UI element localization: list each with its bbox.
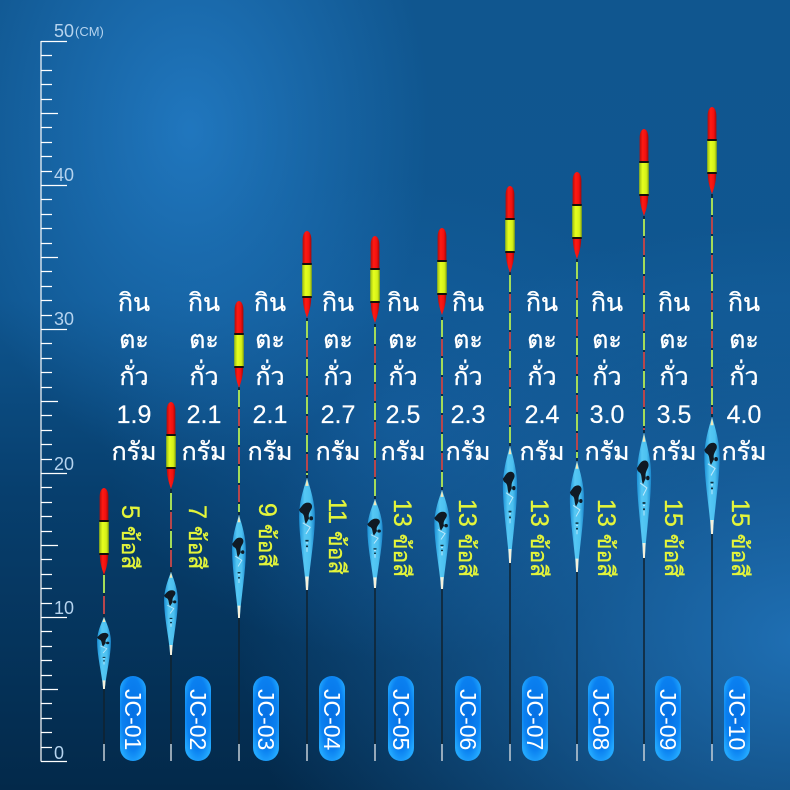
weight label 2.7: กั่ว	[323, 359, 353, 391]
weight label 2.5	[380, 289, 426, 466]
weight label 2.5: กั่ว	[388, 359, 418, 391]
weight label 2.3: ตะ	[453, 326, 483, 354]
badge JC-07: JC-07	[522, 689, 548, 750]
weight label 2.7: ตะ	[323, 326, 353, 354]
weight label 3.0: กั่ว	[592, 359, 622, 391]
weight label 2.1 second	[247, 289, 293, 466]
badge JC-09: JC-09	[655, 689, 681, 750]
segment label 7: 7 ข้อสี	[183, 505, 211, 569]
badge JC-01: JC-01	[120, 689, 146, 750]
weight label 3.5: กั่ว	[659, 359, 689, 391]
weight label 4.0: 4.0	[727, 401, 761, 429]
weight label 1.9	[111, 289, 157, 466]
weight label 2.1 second: กรัม	[247, 438, 293, 466]
weight label 1.9: 1.9	[117, 401, 151, 429]
weight label 2.1: 2.1	[187, 401, 221, 429]
ruler scale: 0	[54, 743, 64, 763]
segment label 13 fourth: 13 ข้อสี	[592, 499, 620, 577]
weight label 2.7: กิน	[322, 289, 354, 317]
segment label 13 second: 13 ข้อสี	[453, 499, 481, 577]
ruler scale: 20	[54, 454, 74, 474]
segment label 15 second: 15 ข้อสี	[726, 499, 754, 577]
badge JC-06: JC-06	[455, 689, 481, 750]
weight label 2.7: 2.7	[321, 401, 355, 429]
float JC-01	[97, 488, 111, 761]
badge JC-03: JC-03	[253, 689, 279, 750]
segment label 5: 5 ข้อสี	[116, 505, 144, 569]
badge JC-08: JC-08	[588, 689, 614, 750]
weight label 4.0: กั่ว	[729, 359, 759, 391]
weight label 2.3: กิน	[452, 289, 484, 317]
float JC-06	[434, 228, 450, 761]
float JC-02	[164, 402, 178, 761]
segment label 13 third: 13 ข้อสี	[525, 499, 553, 577]
weight label 2.1 second: ตะ	[255, 326, 285, 354]
weight label 2.5: กรัม	[380, 438, 426, 466]
weight label 3.0: กรัม	[584, 438, 630, 466]
float JC-04	[299, 231, 315, 761]
float JC-09	[637, 129, 651, 761]
segment label 15: 15 ข้อสี	[659, 499, 687, 577]
weight label 3.5: ตะ	[659, 326, 689, 354]
weight label 2.1 second: กิน	[254, 289, 286, 317]
weight label 1.9: กั่ว	[119, 359, 149, 391]
weight label 2.3: กั่ว	[453, 359, 483, 391]
weight label 2.1: ตะ	[189, 326, 219, 354]
weight label 2.5: กิน	[387, 289, 419, 317]
weight label 2.5: 2.5	[386, 401, 420, 429]
weight label 4.0	[721, 289, 767, 466]
float JC-07	[503, 186, 517, 761]
weight label 3.5: กิน	[658, 289, 690, 317]
ruler scale: 40	[54, 165, 74, 185]
weight label 1.9: กรัม	[111, 438, 157, 466]
weight label 3.5: กรัม	[651, 438, 697, 466]
segment label 9: 9 ข้อสี	[253, 503, 281, 567]
weight label 2.1	[181, 289, 227, 466]
weight label 2.3: กรัม	[445, 438, 491, 466]
segment label 11: 11 ข้อสี	[323, 498, 351, 574]
weight label 2.1 second: กั่ว	[255, 359, 285, 391]
badge JC-05: JC-05	[388, 689, 414, 750]
weight label 2.4	[519, 289, 565, 466]
weight label 3.0: ตะ	[592, 326, 622, 354]
ruler scale: 30	[54, 309, 74, 329]
ruler scale: (CM)	[75, 24, 104, 39]
badge JC-02: JC-02	[185, 689, 211, 750]
weight label 1.9: ตะ	[119, 326, 149, 354]
float JC-05	[367, 236, 383, 761]
weight label 3.0: 3.0	[590, 401, 624, 429]
ruler scale: 10	[54, 598, 74, 618]
weight label 2.1: กรัม	[181, 438, 227, 466]
float JC-08	[570, 172, 584, 761]
weight label 2.1: กิน	[188, 289, 220, 317]
weight label 4.0: กิน	[728, 289, 760, 317]
badge JC-10: JC-10	[724, 689, 750, 750]
weight label 2.4: กิน	[526, 289, 558, 317]
weight label 3.5: 3.5	[657, 401, 691, 429]
ruler scale	[41, 21, 104, 763]
weight label 2.1: กั่ว	[189, 359, 219, 391]
weight label 2.7: กรัม	[315, 438, 361, 466]
weight label 3.0: กิน	[591, 289, 623, 317]
float JC-03	[232, 301, 246, 761]
weight label 1.9: กิน	[118, 289, 150, 317]
ruler scale: 50	[54, 21, 74, 41]
weight label 2.4: กั่ว	[527, 359, 557, 391]
badge JC-04: JC-04	[319, 689, 345, 751]
weight label 4.0: กรัม	[721, 438, 767, 466]
weight label 2.4: 2.4	[525, 401, 559, 429]
segment label 13: 13 ข้อสี	[388, 499, 416, 577]
weight label 2.7	[315, 289, 361, 466]
float JC-10	[704, 107, 720, 761]
weight label 2.3	[445, 289, 491, 466]
weight label 2.4: ตะ	[527, 326, 557, 354]
weight label 3.0	[584, 289, 630, 466]
weight label 2.1 second: 2.1	[253, 401, 287, 429]
weight label 2.3: 2.3	[451, 401, 485, 429]
weight label 3.5	[651, 289, 697, 466]
weight label 2.5: ตะ	[388, 326, 418, 354]
weight label 4.0: ตะ	[729, 326, 759, 354]
weight label 2.4: กรัม	[519, 438, 565, 466]
